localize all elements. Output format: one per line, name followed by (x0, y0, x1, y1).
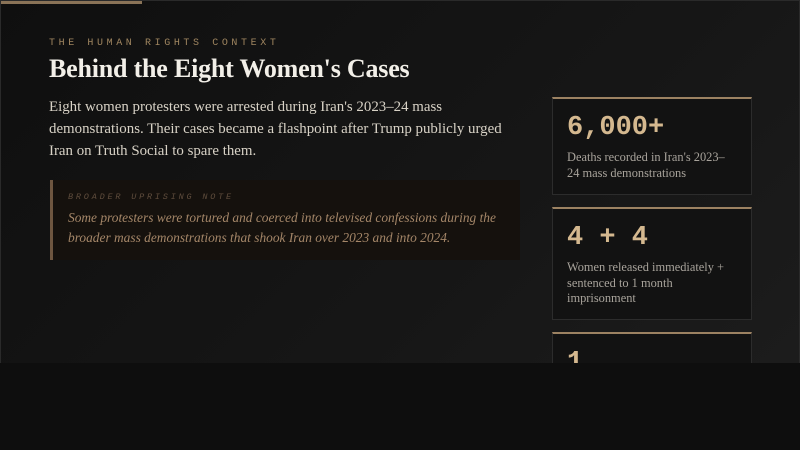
callout: broader uprising note: BROADER UPRISING NOTE (68, 192, 234, 202)
kicker: THE HUMAN RIGHTS CONTEXT (49, 38, 279, 49)
lede paragraph: Eight women protesters were arrested during Iran's 2023–24 mass demonstrations. Their cases became a flashpoint after Trump publicly urged Iran on Truth Social to spare them. (49, 99, 502, 159)
stat card: releases: Women released immediately + sentenced to 1 month imprisonment (567, 260, 724, 305)
callout: broader uprising note: Some protesters were tortured and coerced into televised confessions during the broader mass demonstrations that shook Iran over 2023 and into 2024. (68, 210, 496, 244)
stat card: deaths: Deaths recorded in Iran's 2023–24 mass demonstrations (567, 150, 725, 180)
stat card: releases: 4 + 4 (567, 223, 648, 253)
stat card: deaths (552, 97, 752, 195)
callout: broader uprising note (50, 180, 520, 260)
stat card: third (552, 332, 752, 412)
title: Behind the Eight Women's Cases (49, 54, 409, 83)
stat card: releases (552, 207, 752, 320)
accent bar (1, 1, 142, 4)
stat card: deaths: 6,000+ (567, 113, 664, 143)
